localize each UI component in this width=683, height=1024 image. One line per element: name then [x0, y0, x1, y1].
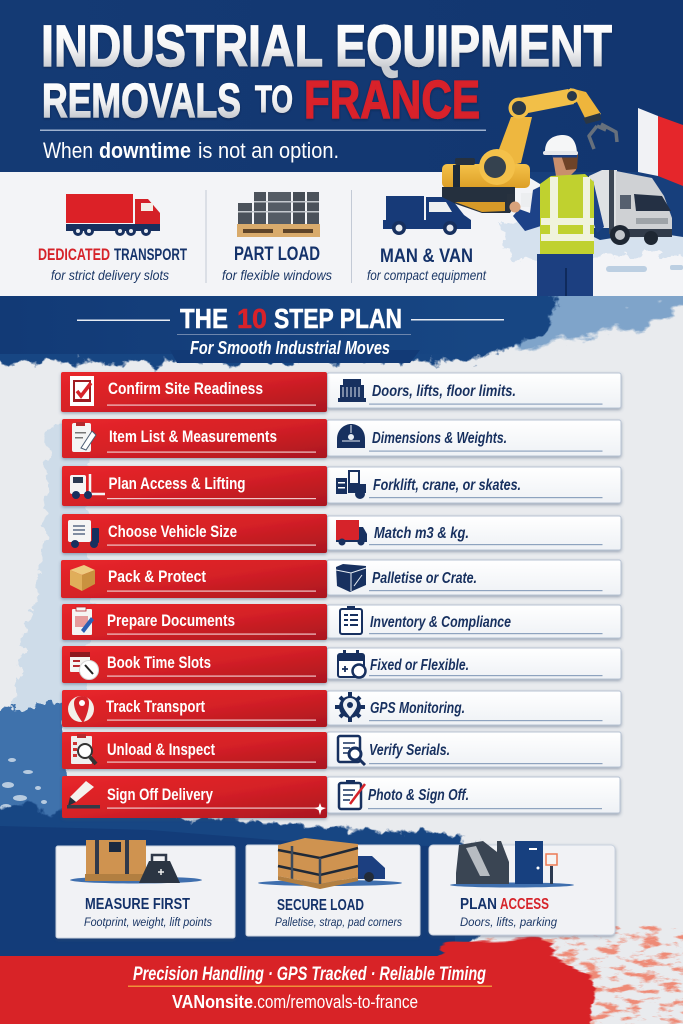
service: man and van — [367, 196, 487, 283]
icon: clipboard and magnifier — [71, 734, 96, 764]
step 6 — [62, 604, 621, 640]
icon: crate — [336, 564, 366, 592]
icon: dome gauge — [337, 424, 365, 448]
icon: stairs and door — [450, 841, 574, 888]
step 10 — [62, 776, 620, 818]
heading text: STEP PLAN — [274, 303, 402, 334]
icon: strapped crate and van — [258, 838, 402, 889]
dividers — [206, 190, 352, 283]
icon: red truck — [66, 194, 160, 236]
icon: pallet — [237, 192, 320, 237]
step 7: Book Time Slots — [107, 653, 211, 672]
card: secure load — [246, 838, 420, 936]
step 8 — [62, 690, 621, 727]
header panel — [0, 0, 683, 173]
card: plan access: Doors, lifts, parking — [460, 915, 557, 929]
description: for flexible windows — [222, 267, 332, 283]
label: PART LOAD — [234, 244, 320, 265]
icon: map pin — [68, 696, 94, 723]
card: plan access — [429, 841, 615, 935]
blue sweep behind flag — [530, 172, 683, 240]
card: plan access: PLAN — [460, 896, 497, 913]
card: secure load: Palletise, strap, pad corners — [275, 915, 402, 929]
card: measure first — [56, 840, 235, 938]
icon: crate and weight — [70, 840, 202, 884]
step 6: Prepare Documents — [107, 611, 235, 630]
label: TRANSPORT — [114, 245, 187, 264]
blue wash under truck — [500, 224, 683, 260]
step 8: Track Transport — [106, 697, 205, 716]
heading text: 10 — [237, 303, 267, 334]
step 1: Doors, lifts, floor limits. — [372, 383, 516, 400]
heading text: THE — [180, 303, 228, 334]
icon: french flag — [638, 108, 683, 186]
heading text — [180, 303, 402, 334]
ground shadows — [606, 265, 683, 272]
card: secure load: SECURE LOAD — [277, 897, 364, 914]
step 1: Confirm Site Readiness — [108, 379, 263, 398]
service: dedicated transport — [38, 194, 187, 283]
label — [38, 245, 187, 264]
card: measure first: Footprint, weight, lift points — [84, 915, 212, 929]
icon: clipboard and pen — [72, 422, 96, 452]
icon: worker — [507, 135, 604, 296]
background: salmon splash — [460, 915, 683, 1024]
step 6: Inventory & Compliance — [370, 614, 511, 631]
section heading — [77, 303, 504, 363]
background: left mid blue mottling — [0, 700, 70, 835]
icon: document and pen — [72, 607, 94, 635]
footer url — [172, 992, 418, 1012]
icon: document van — [68, 520, 99, 548]
service: part load — [222, 192, 332, 283]
description: for strict delivery slots — [51, 267, 169, 283]
step 3 — [62, 466, 621, 506]
title line two: REMOVALS — [42, 75, 241, 128]
step 3: Forklift, crane, or skates. — [373, 477, 521, 494]
icon: document magnifier — [338, 736, 365, 765]
step 7 — [62, 646, 621, 683]
step 10: Sign Off Delivery — [107, 785, 213, 804]
services band — [0, 172, 683, 296]
tagline — [43, 138, 339, 163]
label: MAN & VAN — [380, 246, 473, 267]
step 2: Item List & Measurements — [109, 427, 277, 446]
step 1 — [61, 372, 621, 412]
step 9 — [62, 732, 621, 769]
icon: cardboard box — [70, 565, 95, 591]
step 8: GPS Monitoring. — [370, 700, 465, 717]
tagline: downtime — [99, 138, 191, 163]
step 4: Choose Vehicle Size — [108, 522, 237, 541]
background: red brush — [420, 940, 600, 1024]
step 4: Match m3 & kg. — [374, 525, 469, 542]
step 5: Pack & Protect — [108, 567, 206, 586]
icon: pallet truck — [70, 474, 105, 499]
step 9: Unload & Inspect — [107, 740, 215, 759]
label: DEDICATED — [38, 245, 110, 264]
icon: blue van — [383, 196, 471, 235]
step 4 — [62, 514, 621, 553]
step 3: Plan Access & Lifting — [108, 474, 246, 493]
step 2 — [62, 419, 621, 458]
tagline: When — [43, 138, 93, 163]
step 7: Fixed or Flexible. — [370, 657, 469, 674]
step 10: Photo & Sign Off. — [368, 787, 469, 804]
icon: inventory sheet — [340, 606, 362, 634]
icon: grey truck — [589, 170, 672, 245]
icon: calendar clock — [70, 652, 98, 680]
title line two: TO — [255, 79, 293, 121]
footer url: VANonsite — [172, 992, 253, 1012]
footer band — [0, 956, 540, 1024]
step 9: Verify Serials. — [369, 742, 450, 759]
heading band brush — [0, 260, 683, 364]
background: left pale blue wash — [8, 425, 90, 720]
title line two — [42, 70, 480, 130]
step 2: Dimensions & Weights. — [372, 430, 507, 447]
icon: checklist — [70, 376, 94, 406]
icon: robot arm — [442, 88, 617, 213]
tagline: is not an option. — [198, 138, 339, 163]
icon: signed sheet — [339, 780, 365, 809]
icon: gps gear — [335, 692, 365, 722]
heading subtitle: For Smooth Industrial Moves — [190, 338, 390, 358]
sparkle — [314, 803, 326, 815]
footer tagline: Precision Handling · GPS Tracked · Reliable Timing — [133, 964, 486, 985]
card: plan access: ACCESS — [500, 896, 549, 913]
background: deep blue lower panel — [0, 806, 490, 975]
step 5: Palletise or Crate. — [372, 570, 477, 587]
footer url: .com/removals-to-france — [253, 992, 418, 1012]
title line two: FRANCE — [304, 70, 480, 130]
icon: calendar — [338, 650, 366, 678]
icon: forklift — [336, 471, 366, 499]
step 5 — [61, 560, 621, 598]
icon: building — [338, 379, 366, 402]
description: for compact equipment — [367, 267, 487, 283]
icon: red van — [336, 520, 367, 546]
icon: marker pen — [67, 781, 100, 808]
card: measure first: MEASURE FIRST — [85, 896, 190, 913]
